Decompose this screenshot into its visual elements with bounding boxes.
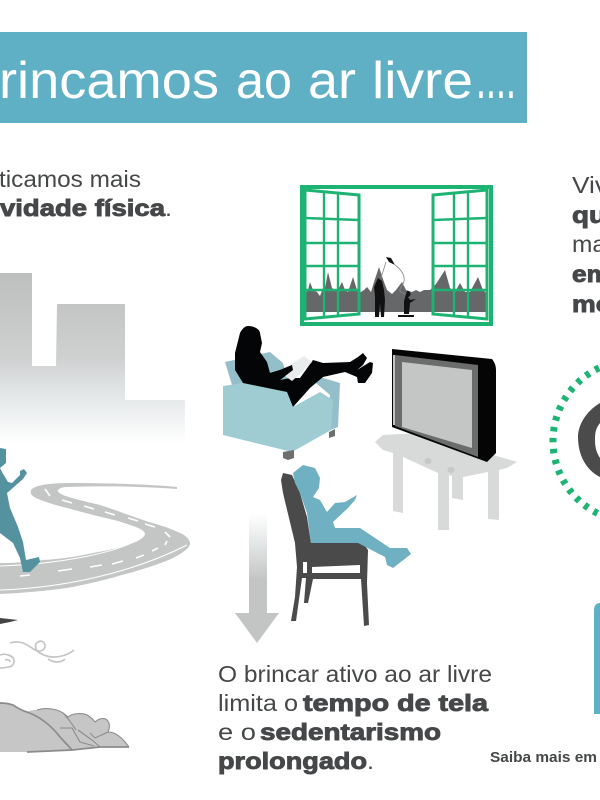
winding road (0, 483, 190, 594)
footer link text: Saiba mais em (490, 750, 597, 766)
trees (305, 267, 487, 312)
text block: screen time: prolongado (218, 748, 367, 774)
runner (0, 448, 40, 572)
text block: screen time (218, 661, 492, 774)
heading: livre (372, 52, 473, 110)
teal card edge (594, 603, 600, 714)
text block: right column: qu (572, 202, 600, 228)
text block: screen time: e o (218, 719, 256, 745)
text block: physical activity: vidade física (0, 195, 166, 221)
heading: ao (236, 52, 292, 110)
armchair (223, 352, 340, 460)
text block: right column (572, 172, 600, 317)
text block: screen time: limita o (218, 690, 298, 716)
adult and child flying kite (374, 257, 416, 317)
chair (281, 473, 369, 626)
text block: screen time: tempo de tela (303, 690, 489, 716)
heading: rincamos (0, 52, 219, 110)
child (293, 465, 411, 568)
header banner (0, 32, 527, 123)
child on chair (281, 465, 411, 626)
skyline (0, 273, 185, 444)
heading: .... (476, 43, 516, 112)
right shutter (433, 190, 487, 319)
text block: screen time: sedentarismo (260, 719, 441, 745)
down arrow (235, 513, 279, 643)
text block: physical activity (0, 166, 172, 221)
dark arc icon (578, 403, 600, 477)
wind swirls (0, 641, 74, 668)
woman reading (235, 326, 373, 407)
heading: ar (308, 52, 356, 110)
text block: physical activity: . (165, 195, 172, 221)
text block: physical activity: ticamos mais (0, 166, 141, 192)
dotted green ring (553, 360, 600, 522)
tv body (392, 349, 496, 462)
text block: screen time: O brincar ativo ao ar livre (218, 661, 492, 687)
dark ground mark (0, 618, 18, 624)
rocks (0, 703, 129, 752)
window with kite scene (302, 187, 491, 324)
left shutter (305, 190, 359, 319)
green frame (302, 187, 491, 324)
television on table (375, 349, 517, 530)
book (285, 356, 312, 381)
text block: screen time: . (367, 748, 374, 774)
table (375, 433, 517, 530)
heading (0, 43, 516, 112)
